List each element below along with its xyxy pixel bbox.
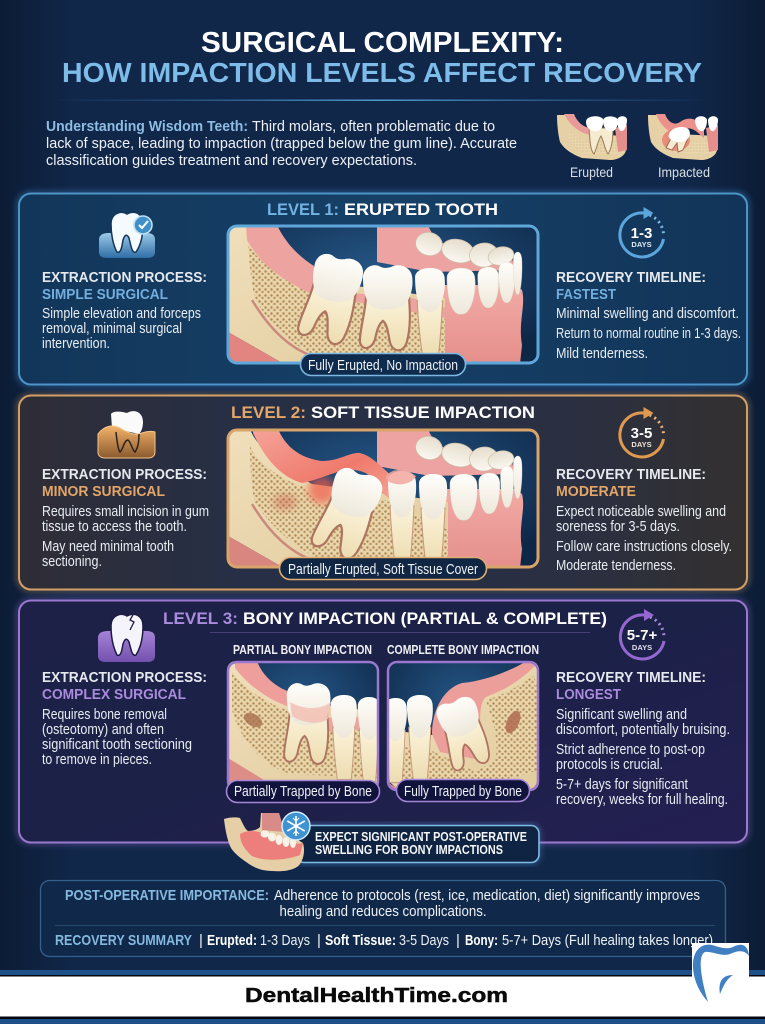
label: impacted: Impacted — [658, 164, 710, 180]
recovery text: Strict adherence to post-op — [556, 742, 705, 758]
recovery text — [556, 270, 741, 362]
callout: swelling warning: EXPECT SIGNIFICANT POST-OPERATIVE — [315, 830, 527, 844]
icon: ice snowflake — [282, 812, 310, 840]
recovery text: recovery, weeks for full healing. — [556, 792, 728, 808]
caption pill — [300, 354, 466, 376]
recovery text — [556, 467, 732, 574]
extraction text: tissue to access the tooth. — [42, 519, 187, 535]
extraction text: (osteotomy) and often — [42, 722, 164, 738]
recovery summary: RECOVERY SUMMARY — [55, 932, 192, 949]
extraction text: Simple elevation and forceps — [42, 306, 201, 322]
recovery text: Mild tenderness. — [556, 346, 648, 362]
extraction text: intervention. — [42, 336, 110, 352]
recovery text: FASTEST — [556, 287, 616, 303]
illustration: soft tissue impaction — [227, 429, 539, 568]
icon: 1-3 days clock — [620, 207, 664, 257]
subheading: complete bony impaction: COMPLETE BONY IMPACTION — [387, 642, 539, 657]
icon: 5-7+ days clock: 5-7+ — [627, 627, 657, 644]
label: erupted: Erupted — [570, 164, 613, 180]
icon: swollen jaw — [224, 813, 304, 871]
heading: level 1 — [267, 200, 498, 219]
recovery text: LONGEST — [556, 687, 621, 703]
panel: level 2 soft tissue impaction — [18, 395, 748, 590]
intro text block: lack of space, leading to impaction (trapped below the gum line). Accurate — [46, 135, 517, 152]
heading: level 1: LEVEL 1: — [267, 200, 339, 219]
title: SURGICAL COMPLEXITY: — [201, 27, 564, 59]
post-operative text: Adherence to protocols (rest, ice, medication, diet) significantly improves — [274, 887, 700, 904]
post-operative text: POST-OPERATIVE IMPORTANCE: — [65, 887, 269, 904]
extraction text: MINOR SURGICAL — [42, 484, 165, 500]
icon: 5-7+ days clock: DAYS — [632, 643, 652, 652]
recovery text: protocols is crucial. — [556, 757, 663, 773]
title: HOW IMPACTION LEVELS AFFECT RECOVERY — [62, 57, 702, 88]
caption pill: Fully Erupted, No Impaction — [308, 358, 458, 374]
caption pill: Partially Erupted, Soft Tissue Cover — [288, 562, 478, 578]
intro text block: classification guides treatment and recovery expectations. — [46, 152, 417, 169]
caption pill — [396, 780, 530, 802]
title — [62, 27, 702, 88]
recovery text: Significant swelling and — [556, 707, 687, 723]
extraction text: May need minimal tooth — [42, 539, 174, 555]
icon: 1-3 days clock: DAYS — [631, 240, 652, 249]
extraction text: sectioning. — [42, 554, 102, 570]
panel: level 1 erupted tooth — [18, 193, 748, 385]
icon: healthy tooth with check — [99, 212, 155, 258]
recovery summary: 5-7+ Days (Full healing takes longer) — [502, 932, 713, 949]
recovery text: MODERATE — [556, 484, 636, 500]
logo: tooth — [692, 943, 749, 1002]
heading: level 2 — [231, 403, 535, 422]
illustration: partial bony impaction — [227, 661, 380, 791]
extraction text: significant tooth sectioning — [42, 737, 192, 753]
intro text block: Understanding Wisdom Teeth: — [46, 118, 248, 135]
intro text block — [46, 118, 517, 169]
heading: level 3: LEVEL 3: — [163, 609, 238, 628]
heading: level 1: ERUPTED TOOTH — [344, 200, 498, 219]
recovery text: RECOVERY TIMELINE: — [556, 270, 706, 286]
footer band: DentalHealthTime.com — [245, 985, 508, 1007]
callout: swelling warning: SWELLING FOR BONY IMPACTIONS — [315, 843, 503, 857]
extraction text: EXTRACTION PROCESS: — [42, 670, 207, 686]
recovery text: soreness for 3-5 days. — [556, 519, 680, 535]
icon: partially covered tooth — [98, 411, 155, 458]
caption pill — [226, 780, 380, 802]
recovery summary: Soft Tissue: — [325, 932, 396, 949]
heading: level 2: SOFT TISSUE IMPACTION — [311, 403, 535, 422]
post-operative text: healing and reduces complications. — [280, 903, 486, 920]
extraction text: to remove in pieces. — [42, 752, 152, 768]
callout: swelling warning — [296, 825, 539, 863]
recovery text: RECOVERY TIMELINE: — [556, 670, 706, 686]
caption pill — [280, 558, 486, 580]
recovery text: Follow care instructions closely. — [556, 539, 732, 555]
extraction text: Requires small incision in gum — [42, 504, 209, 520]
icon: 3-5 days clock: 3-5 — [631, 425, 652, 442]
extraction text: SIMPLE SURGICAL — [42, 287, 168, 303]
post-operative text — [65, 887, 700, 920]
extraction text: removal, minimal surgical — [42, 321, 182, 337]
extraction text — [42, 670, 207, 768]
recovery text: RECOVERY TIMELINE: — [556, 467, 706, 483]
caption pill: Partially Trapped by Bone — [234, 784, 372, 800]
icon: 3-5 days clock — [620, 407, 664, 457]
recovery summary: | — [456, 932, 460, 949]
panel: level 3 bony impaction — [18, 600, 748, 843]
recovery summary: | — [199, 932, 203, 949]
icon: 5-7+ days clock — [620, 609, 664, 659]
panel: post-operative importance and summary — [40, 880, 726, 956]
extraction text: EXTRACTION PROCESS: — [42, 270, 207, 286]
illustration: complete bony impaction — [384, 661, 539, 791]
recovery summary: Bony: — [465, 932, 498, 949]
footer band — [0, 970, 765, 1024]
recovery text: discomfort, potentially bruising. — [556, 722, 730, 738]
extraction text: Requires bone removal — [42, 707, 167, 723]
recovery summary: 3-5 Days — [399, 932, 449, 949]
recovery text: Minimal swelling and discomfort. — [556, 306, 739, 322]
extraction text — [42, 270, 207, 352]
recovery summary: Erupted: — [207, 932, 257, 949]
illustration: erupted tooth — [227, 225, 539, 364]
intro text block: Third molars, often problematic due to — [252, 118, 495, 135]
recovery summary: 1-3 Days — [260, 932, 310, 949]
recovery text: Expect noticeable swelling and — [556, 504, 726, 520]
extraction text: COMPLEX SURGICAL — [42, 687, 186, 703]
recovery text — [556, 670, 730, 808]
recovery summary — [55, 932, 713, 949]
caption pill: Fully Trapped by Bone — [404, 784, 522, 800]
subheading: partial bony impaction: PARTIAL BONY IMPACTION — [233, 642, 372, 657]
icon: 1-3 days clock: 1-3 — [631, 225, 652, 242]
heading: level 3: BONY IMPACTION (PARTIAL & COMPLETE) — [243, 609, 607, 628]
icon: 3-5 days clock: DAYS — [631, 440, 652, 449]
recovery text: 5-7+ days for significant — [556, 777, 688, 793]
icon: cracked tooth — [98, 613, 155, 662]
extraction text — [42, 467, 209, 570]
heading: level 2: LEVEL 2: — [231, 403, 306, 422]
mini illustration: impacted — [648, 114, 718, 160]
recovery text: Moderate tenderness. — [556, 558, 676, 574]
recovery summary: | — [317, 932, 321, 949]
extraction text: EXTRACTION PROCESS: — [42, 467, 207, 483]
mini illustration: erupted — [557, 114, 627, 160]
